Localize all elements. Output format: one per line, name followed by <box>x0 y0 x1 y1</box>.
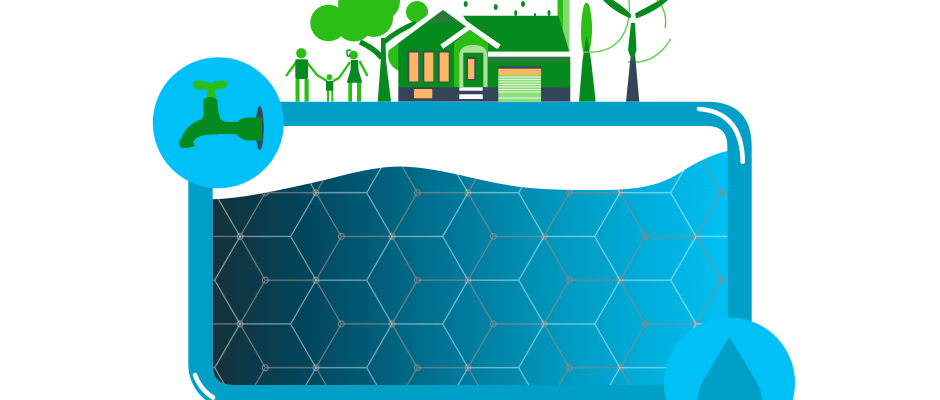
roof lines <box>387 7 498 48</box>
child <box>326 74 333 102</box>
main gable <box>398 9 488 88</box>
family of three holding hands <box>286 48 368 102</box>
windows <box>408 51 449 98</box>
house <box>387 0 570 102</box>
tree behind house <box>310 0 428 102</box>
water fill with gradient <box>213 151 727 385</box>
garage wing <box>463 16 570 88</box>
rain drops <box>464 1 550 17</box>
foundation <box>398 87 570 102</box>
icon: faucet <box>179 80 264 150</box>
water drop badge <box>664 317 795 400</box>
garage door <box>498 66 541 102</box>
man <box>286 48 327 102</box>
highlight: top right corner <box>699 109 743 162</box>
hexagon grid overlay <box>213 151 727 385</box>
tank frame <box>188 102 752 400</box>
entry porch <box>454 30 488 99</box>
poplar tree <box>579 3 596 102</box>
chimney <box>558 0 570 52</box>
icon: water drop <box>698 337 762 400</box>
highlight: bottom left corner <box>195 375 213 398</box>
woman <box>333 50 368 102</box>
faucet badge <box>153 57 284 188</box>
wind turbine <box>583 0 671 102</box>
